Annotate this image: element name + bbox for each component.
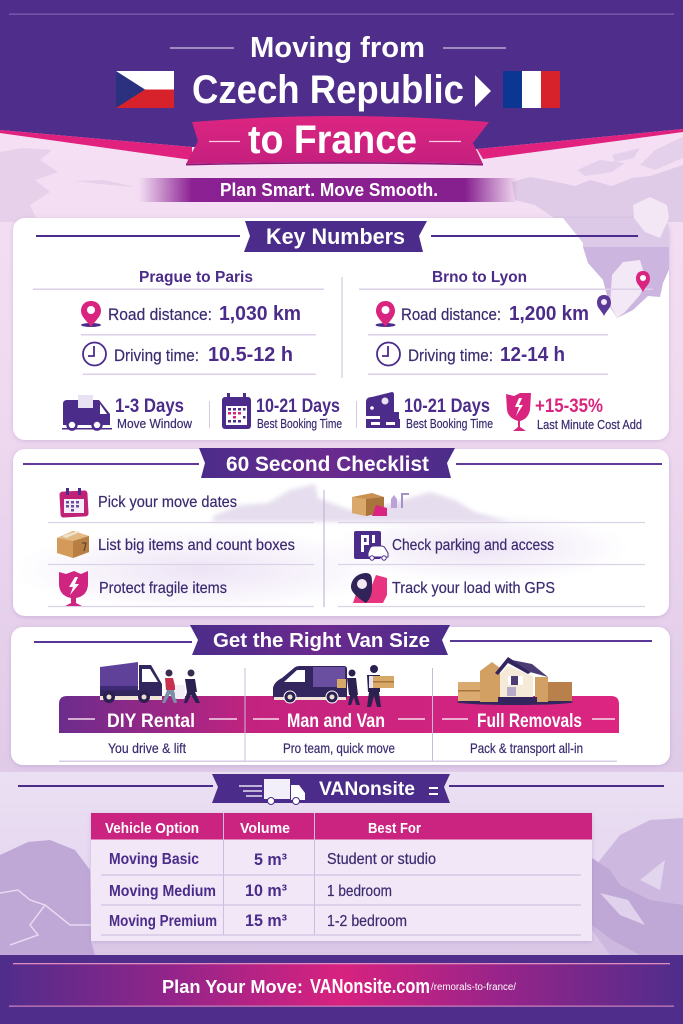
Hudson Bay on map xyxy=(633,197,669,238)
heading ribbon: checklist xyxy=(23,448,662,478)
option: DIY rental: DIY Rental xyxy=(107,711,195,732)
option: man and van xyxy=(253,665,425,756)
footer bar: VANonsite.com xyxy=(310,976,430,998)
icon: boxes and tag xyxy=(366,392,400,428)
lavender wash in checklist xyxy=(10,528,390,612)
checklist item: check parking xyxy=(354,531,554,560)
icon: fragile shield glass xyxy=(59,571,88,606)
title line 2: Czech Republic xyxy=(192,68,464,112)
icon: map pin xyxy=(376,301,396,327)
brand ribbon: VANonsite: VANonsite xyxy=(319,779,415,800)
icon: cardboard box xyxy=(57,531,89,558)
column: Prague to Paris: 10.5-12 h xyxy=(208,344,293,366)
world map: top right north america xyxy=(512,137,683,222)
checklist item: track with gps xyxy=(351,573,555,603)
option: full removals: Full Removals xyxy=(477,711,582,732)
brand ribbon: VANonsite xyxy=(18,774,664,804)
stat: move window: Move Window xyxy=(117,416,193,431)
checklist item: protect fragile xyxy=(59,571,227,606)
row: moving premium xyxy=(109,911,407,930)
world map: bottom right xyxy=(592,818,683,955)
stat: best booking time 2 xyxy=(366,392,493,431)
stat: best booking time 2: 10-21 Days xyxy=(404,396,490,417)
stat: best booking time: Best Booking Time xyxy=(257,416,342,431)
column: Brno to Lyon xyxy=(359,269,653,375)
stat: best booking time xyxy=(222,393,342,431)
flag: France xyxy=(503,71,560,108)
row: moving basic: Student or studio xyxy=(327,851,436,868)
option: full removals xyxy=(442,657,615,756)
illustration: rental truck and movers xyxy=(100,662,200,703)
table header: Volume xyxy=(240,820,290,837)
icon: calendar xyxy=(222,393,251,429)
option: DIY rental: You drive & lift xyxy=(108,740,186,756)
column: Brno to Lyon: Driving time: xyxy=(408,346,493,365)
row: moving basic xyxy=(109,850,436,869)
illustration: house and boxes xyxy=(457,657,573,705)
row: moving premium: Moving Premium xyxy=(109,913,217,930)
option: man and van: Man and Van xyxy=(287,711,385,732)
stat: best booking time: 10-21 Days xyxy=(256,396,340,417)
column: Brno to Lyon: 1,200 km xyxy=(509,303,589,325)
map over key numbers panel xyxy=(563,218,669,318)
option: full removals: Pack & transport all-in xyxy=(470,740,583,756)
row: moving premium: 1-2 bedroom xyxy=(327,913,407,930)
table grid lines xyxy=(224,813,314,935)
icon: clock xyxy=(83,342,106,366)
stat: last minute cost xyxy=(506,393,642,432)
stat: last minute cost: Last Minute Cost Add xyxy=(537,417,642,432)
pink swoosh right xyxy=(477,129,683,159)
page background xyxy=(0,0,683,772)
ribbon: to France: to France xyxy=(248,118,417,162)
table header: Best For xyxy=(368,820,421,837)
row: moving premium: 15 m³ xyxy=(245,911,287,930)
column divider xyxy=(324,490,325,607)
illustration: van and team xyxy=(273,665,394,707)
footer bar: /remorals-to-france/ xyxy=(431,982,516,993)
checklist item: track with gps: Track your load with GPS xyxy=(392,580,555,597)
heading ribbon: key numbers: Key Numbers xyxy=(266,224,405,249)
lower background xyxy=(0,772,683,962)
heading ribbon: van size: Get the Right Van Size xyxy=(213,630,430,652)
icon: removal truck xyxy=(62,395,112,430)
icon: pink location pin on map xyxy=(636,271,650,292)
tagline band xyxy=(139,178,518,202)
checklist item: list big items xyxy=(57,531,295,558)
column: Prague to Paris: Prague to Paris xyxy=(139,269,253,286)
header banner xyxy=(0,0,683,166)
row: moving medium: 1 bedroom xyxy=(327,883,392,900)
panel: key numbers xyxy=(13,218,683,440)
world map: bottom left xyxy=(0,840,95,955)
row: moving medium: Moving Medium xyxy=(109,883,216,900)
panel: 60 second checklist xyxy=(10,448,669,616)
table header: Vehicle Option xyxy=(105,820,199,837)
checklist item: pick your move dates: Pick your move dates xyxy=(98,494,237,511)
lavender wash in checklist right xyxy=(330,512,630,584)
column: Prague to Paris xyxy=(33,269,324,375)
icon: fragile glass xyxy=(506,393,531,431)
checklist item: protect fragile: Protect fragile items xyxy=(99,580,227,597)
icon: moving truck xyxy=(239,779,305,804)
tagline band: Plan Smart. Move Smooth. xyxy=(220,180,438,200)
flag: Czech Republic xyxy=(116,71,174,108)
column dividers xyxy=(245,668,432,761)
icon: parking sign xyxy=(354,531,388,560)
panel background xyxy=(13,218,669,440)
icon: calendar xyxy=(59,488,89,518)
checklist row dividers xyxy=(48,522,645,606)
footer bar: Plan Your Move: xyxy=(162,977,303,997)
panel background xyxy=(13,449,669,616)
ribbon: to France xyxy=(186,116,489,166)
stat: last minute cost: +15-35% xyxy=(535,396,603,417)
stat: move window: 1-3 Days xyxy=(115,396,184,417)
pink swoosh left xyxy=(0,130,192,160)
icon: purple location pin on map xyxy=(597,295,611,316)
column: Brno to Lyon: 12-14 h xyxy=(500,344,565,366)
panel background xyxy=(11,627,670,765)
stat divider xyxy=(209,401,210,428)
panel: get the right van size xyxy=(11,625,670,765)
title line 1: Moving from xyxy=(250,32,425,64)
icon: clock xyxy=(377,342,400,366)
icon: gps pin and map xyxy=(351,573,387,603)
stat divider xyxy=(356,401,357,428)
icon: map pin xyxy=(81,301,101,327)
checklist item: parking box row xyxy=(352,493,409,516)
column: Prague to Paris: Road distance: xyxy=(108,305,212,324)
column divider xyxy=(342,277,343,378)
column: Brno to Lyon: Road distance: xyxy=(401,305,501,324)
header purple shape xyxy=(0,0,683,149)
colour band xyxy=(59,696,619,733)
top rule xyxy=(9,14,674,15)
table body xyxy=(91,813,592,941)
world map: top left xyxy=(0,148,135,222)
stat: move window xyxy=(62,395,193,431)
arrow xyxy=(475,75,491,107)
row: moving medium: 10 m³ xyxy=(245,881,287,900)
icon: box with arrows xyxy=(352,493,409,516)
column: Prague to Paris: Driving time: xyxy=(114,346,199,365)
row: moving basic: 5 m³ xyxy=(254,850,287,869)
column: Prague to Paris: 1,030 km xyxy=(219,303,301,325)
checklist item: check parking: Check parking and access xyxy=(392,537,554,554)
faint map in checklist xyxy=(213,484,510,522)
checklist item: list big items: List big items and count boxes xyxy=(98,537,295,554)
footer bar xyxy=(0,955,683,1024)
bottom divider xyxy=(59,760,617,762)
table: vehicle options xyxy=(91,813,592,941)
row: moving medium xyxy=(109,881,392,900)
table header xyxy=(91,813,592,840)
row: moving basic: Moving Basic xyxy=(109,851,199,868)
checklist item: pick your move dates xyxy=(59,488,237,518)
option: man and van: Pro team, quick move xyxy=(283,740,395,756)
stat: best booking time 2: Best Booking Time xyxy=(406,416,493,431)
heading ribbon: checklist: 60 Second Checklist xyxy=(226,453,429,476)
option: DIY rental xyxy=(68,662,237,756)
heading ribbon: van size xyxy=(34,625,652,655)
heading ribbon: key numbers xyxy=(36,221,638,252)
column: Brno to Lyon: Brno to Lyon xyxy=(432,269,527,286)
